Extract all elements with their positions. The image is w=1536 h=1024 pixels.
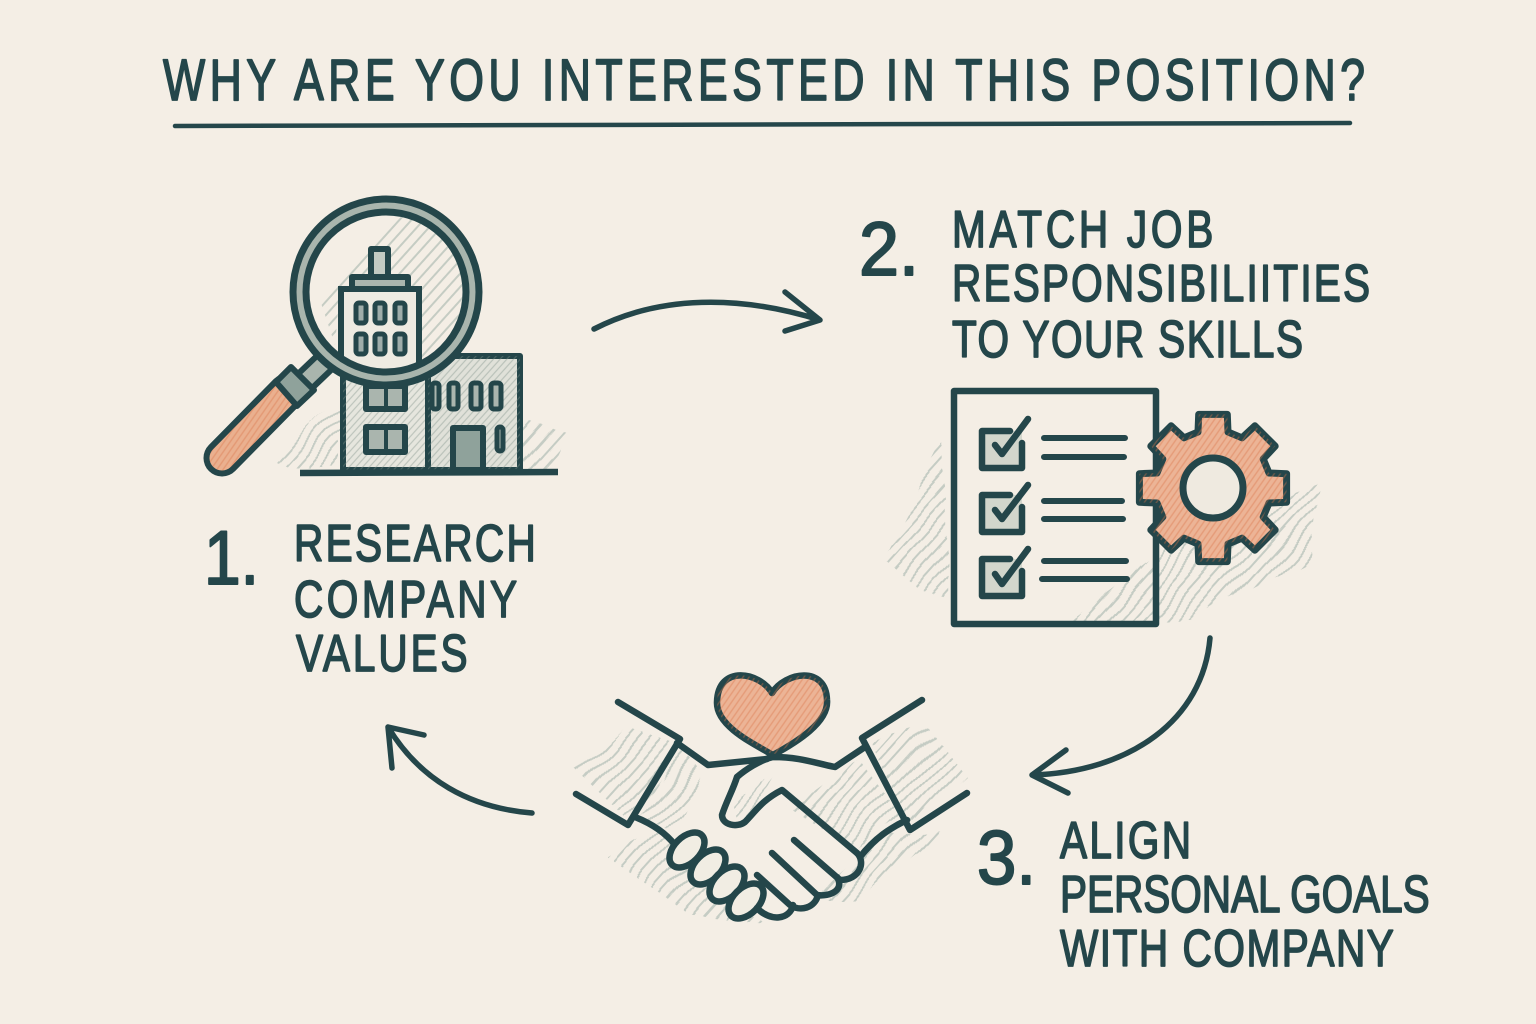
checklist item 1 — [982, 419, 1125, 468]
icon: checklist and gear — [885, 391, 1320, 624]
arrow: step 2 to step 3 — [1032, 638, 1210, 793]
step 2 label — [859, 200, 1370, 368]
step 2 label: RESPONSIBILIITIES — [952, 254, 1370, 312]
step 3 label: ALIGN — [1060, 811, 1191, 869]
arrow: step 1 to step 2 — [594, 292, 820, 331]
step 2 label: MATCH JOB — [952, 200, 1213, 258]
shading behind handshake — [576, 725, 965, 925]
checklist sheet — [954, 391, 1156, 624]
shading behind buildings — [275, 395, 565, 468]
icon: handshake with heart — [576, 675, 967, 925]
step 1 label — [204, 514, 536, 682]
title: WHY ARE YOU INTERESTED IN THIS POSITION? — [163, 47, 1365, 112]
step 1 label: RESEARCH — [294, 514, 536, 572]
step 2 label: 2. — [859, 207, 919, 292]
icon: magnifying glass over company buildings — [222, 199, 565, 473]
lens hatching — [322, 217, 462, 358]
lens glass — [306, 212, 466, 372]
right hand and thumb — [722, 747, 907, 857]
right cuff — [862, 700, 967, 830]
checklist item 2 — [982, 485, 1123, 532]
step 3 label: WITH COMPANY — [1060, 919, 1394, 977]
gear — [1139, 414, 1287, 562]
magnifier ring — [293, 199, 479, 385]
arrow: step 3 back to step 1 — [388, 727, 532, 813]
ground line — [300, 472, 558, 473]
step 1 label: COMPANY — [294, 570, 517, 628]
step 3 label: PERSONAL GOALS — [1060, 865, 1430, 923]
tower inside lens — [341, 249, 419, 379]
step 3 label — [977, 811, 1430, 977]
checklist item 3 — [982, 549, 1127, 596]
shading behind checklist — [885, 440, 1320, 620]
right fingers — [757, 840, 861, 917]
magnifier handle — [222, 362, 325, 458]
step 1 label: 1. — [204, 516, 259, 601]
left cuff — [576, 702, 680, 825]
left hand — [635, 743, 767, 845]
step 3 label: 3. — [977, 816, 1036, 901]
step 1 label: VALUES — [296, 624, 468, 682]
step 2 label: TO YOUR SKILLS — [952, 310, 1303, 368]
lower right building — [428, 356, 520, 470]
lower left building — [343, 375, 428, 470]
left fingers — [663, 826, 770, 925]
heart — [717, 675, 827, 755]
